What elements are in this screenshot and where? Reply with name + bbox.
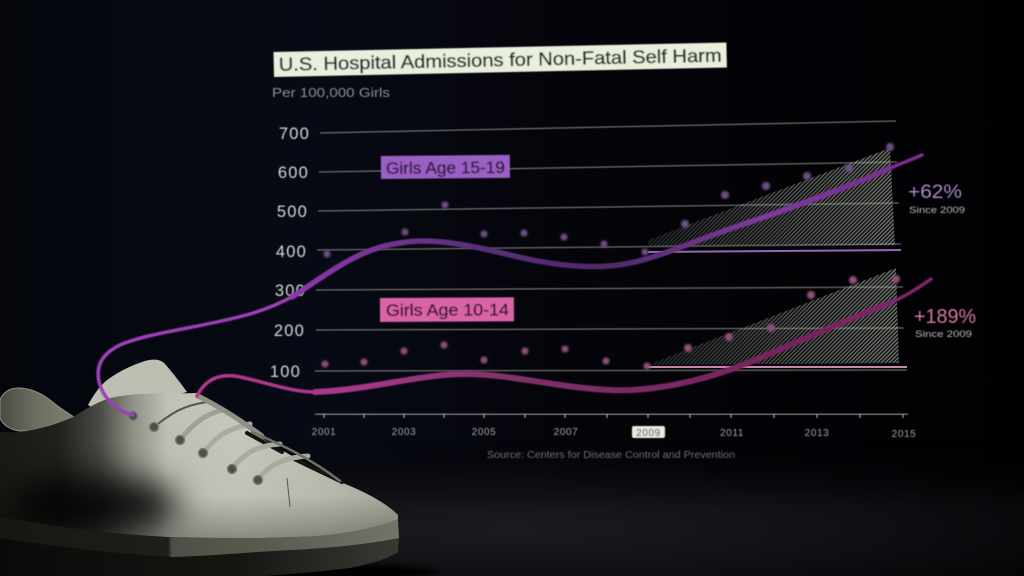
tongue — [88, 360, 187, 410]
y axis labels: 500 — [277, 203, 308, 221]
eyelets — [128, 412, 262, 484]
laces — [155, 396, 342, 482]
toe seam — [287, 478, 290, 507]
x axis labels: 2001 — [312, 427, 336, 438]
sole base — [0, 535, 399, 576]
y axis labels: 200 — [274, 322, 305, 340]
callout: +189%: Since 2009 — [915, 329, 972, 339]
y axis labels: 300 — [275, 282, 306, 300]
highlighted year 2009: 2009 — [636, 428, 661, 439]
x axis labels: 2015 — [892, 429, 916, 440]
sole band — [0, 517, 399, 557]
y axis labels: 700 — [279, 125, 310, 143]
x axis labels — [312, 427, 916, 440]
x axis labels: 2003 — [392, 427, 416, 438]
label: girls age 15-19 — [381, 155, 510, 179]
x axis labels: 2005 — [472, 427, 496, 438]
baseline 2009: girls 10-14 — [648, 366, 907, 368]
y axis labels: 600 — [278, 164, 309, 182]
source note: Source: Centers for Disease Control and Prevention — [487, 450, 735, 461]
shoe — [0, 360, 440, 576]
callout: +62%: +62% — [908, 182, 962, 203]
data points: girls 10-14 — [322, 275, 900, 370]
dark heel shadow — [10, 475, 180, 535]
grid lines — [315, 121, 907, 371]
curve: girls age 15-19 lace — [98, 155, 922, 415]
label: girls age 10-14 — [380, 297, 514, 322]
callout: +62% — [908, 182, 965, 215]
x axis labels: 2007 — [554, 427, 578, 438]
shoe floor shadow — [60, 562, 440, 576]
label: girls age 15-19: Girls Age 15-19 — [386, 159, 505, 178]
upper — [0, 385, 400, 545]
x axis — [315, 414, 908, 418]
baseline 2009: girls 15-19 — [648, 250, 901, 252]
chart — [270, 121, 916, 461]
subtitle: Per 100,000 Girls — [272, 86, 390, 100]
title: U.S. Hospital Admissions for Non-Fatal Self Harm — [279, 46, 722, 75]
y axis labels — [270, 125, 310, 381]
curve: girls age 10-14 lace — [197, 279, 931, 396]
callout: +189%: +189% — [914, 306, 976, 328]
hatch area: girls 10-14 — [650, 268, 899, 365]
label: girls age 10-14: Girls Age 10-14 — [386, 300, 509, 320]
x axis labels: 2011 — [720, 428, 744, 439]
floor — [368, 484, 1024, 576]
callout: +189% — [914, 306, 976, 339]
hatch area: girls 15-19 — [648, 148, 895, 246]
data points: girls 15-19 — [324, 143, 894, 258]
heel collar — [0, 388, 74, 431]
y axis labels: 400 — [276, 243, 307, 261]
highlighted year 2009 — [632, 426, 665, 439]
x axis labels: 2013 — [805, 428, 829, 439]
y axis labels: 100 — [270, 363, 301, 381]
callout: +62%: Since 2009 — [909, 205, 965, 215]
